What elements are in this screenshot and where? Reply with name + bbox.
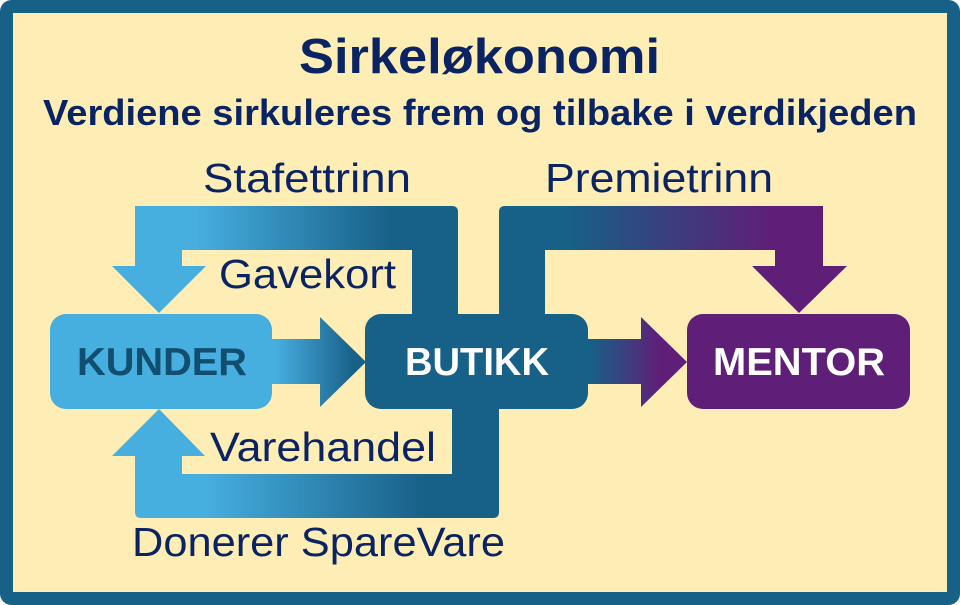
arrow: Premietrinn from Butikk to Mentor bbox=[499, 206, 847, 316]
box: Mentor: MENTOR bbox=[713, 341, 885, 384]
box: Butikk: BUTIKK bbox=[405, 341, 549, 384]
arrow: Butikk to Mentor bbox=[586, 317, 687, 407]
label: Premietrinn: Premietrinn bbox=[545, 155, 773, 201]
arrow: Kunder to Butikk bbox=[270, 317, 366, 407]
box: Kunder bbox=[50, 314, 272, 409]
title: Sirkeløkonomi bbox=[299, 30, 660, 84]
label: Stafettrinn: Stafettrinn bbox=[203, 155, 411, 201]
label: Varehandel: Varehandel bbox=[210, 424, 436, 470]
box: Butikk bbox=[365, 314, 588, 409]
box: Kunder: KUNDER bbox=[77, 341, 247, 384]
box: Mentor bbox=[687, 314, 910, 409]
arrow: Stafettrinn from Butikk to Kunder bbox=[112, 206, 458, 316]
subtitle: Verdiene sirkuleres frem og tilbake i verdikjeden bbox=[43, 92, 917, 133]
label: Donerer SpareVare: Donerer SpareVare bbox=[132, 519, 505, 565]
arrow: Donerer SpareVare from Butikk to Kunder bbox=[112, 405, 499, 518]
label: Gavekort: Gavekort bbox=[219, 251, 397, 297]
